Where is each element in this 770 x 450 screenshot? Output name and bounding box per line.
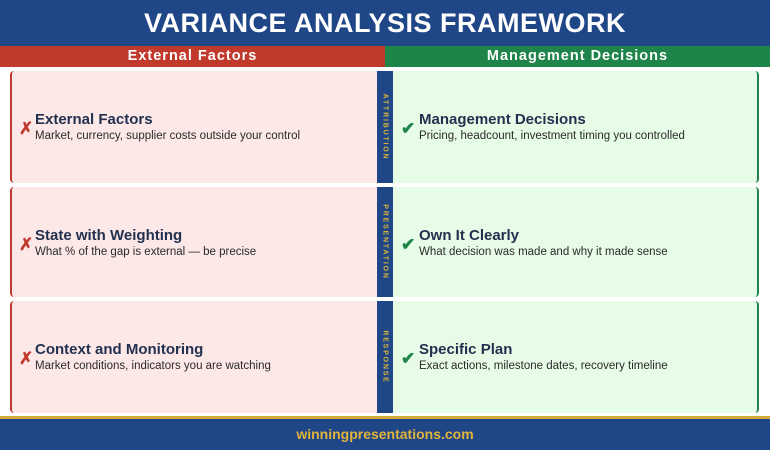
panel: row3 right [393,301,759,413]
text: Pricing, headcount, investment timing you controlled [419,130,685,142]
panel: row1 right [393,71,759,183]
panel: row3 left [10,301,377,413]
column header: management: Management Decisions [487,48,668,64]
column header: management [385,46,770,67]
heading: State with Weighting [35,227,182,244]
icon: cross: ✗ [19,235,33,254]
text: Market, currency, supplier costs outside your control [35,130,300,142]
footer [0,416,770,450]
label: presentation [377,187,393,297]
icon: cross: ✗ [19,119,33,138]
panel: row2 left [10,187,377,297]
column header: external [0,46,385,67]
label: attribution: ATTRIBUTION [382,94,388,160]
label: response [377,301,393,413]
label: response: RESPONSE [382,330,388,384]
panel: row1 left [10,71,377,183]
heading: Specific Plan [419,341,512,358]
heading: External Factors [35,111,153,128]
column header: external: External Factors [128,48,257,64]
icon: cross: ✗ [19,349,33,368]
text: Market conditions, indicators you are watching [35,360,271,372]
icon: check: ✔ [401,119,415,138]
label: attribution [377,71,393,183]
icon: check: ✔ [401,349,415,368]
heading: Own It Clearly [419,227,519,244]
title [0,0,770,46]
text: What % of the gap is external — be precise [35,246,256,258]
title: VARIANCE ANALYSIS FRAMEWORK [144,8,626,38]
footer: winningpresentations.com [296,426,474,442]
icon: check: ✔ [401,235,415,254]
label: presentation: PRESENTATION [382,204,388,280]
heading: Management Decisions [419,111,586,128]
text: What decision was made and why it made sense [419,246,668,258]
heading: Context and Monitoring [35,341,203,358]
text: Exact actions, milestone dates, recovery timeline [419,360,668,372]
panel: row2 right [393,187,759,297]
